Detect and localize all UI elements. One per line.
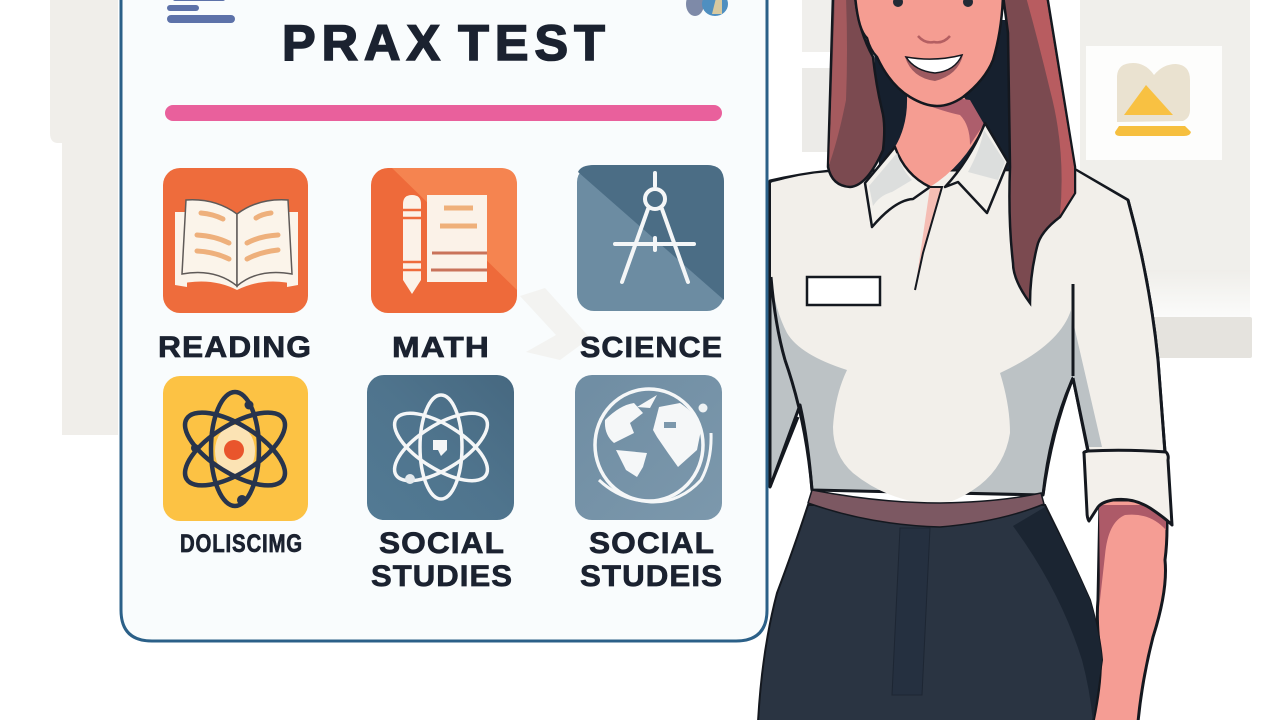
label: social, right column: SOCIAL — [589, 527, 715, 560]
tile: globe — [575, 375, 722, 520]
arm shadow — [1099, 505, 1166, 600]
hair right — [1003, 0, 1075, 303]
icon: open book — [175, 200, 298, 290]
label: math: MATH — [392, 332, 490, 364]
nose — [918, 36, 950, 42]
label: science: SCIENCE — [580, 332, 723, 364]
waistband — [808, 490, 1044, 527]
tile: science — [577, 165, 724, 311]
background: right wall panel — [802, 0, 1252, 358]
top-right globe mark — [686, 0, 728, 16]
face — [855, 0, 1003, 106]
neck shadow — [918, 98, 984, 145]
label: social studies, first line: SOCIAL — [379, 527, 505, 560]
sleeve cuff — [1084, 450, 1172, 525]
skirt — [758, 505, 1102, 720]
icon: globe — [595, 389, 711, 502]
main card panel — [121, 0, 767, 641]
tile: reading — [163, 168, 308, 313]
icon: atom dark — [174, 392, 296, 506]
blouse placket — [915, 187, 942, 290]
tile: social studies atom — [367, 375, 514, 520]
tile: math — [371, 168, 517, 313]
label: studeis, right column: STUDEIS — [580, 560, 723, 593]
wall picture: pyramid on book — [1086, 46, 1222, 160]
label: reading: READING — [158, 331, 312, 364]
blouse — [770, 170, 1165, 503]
arm — [1093, 500, 1167, 720]
icon: pencil and notebook — [403, 195, 487, 294]
label: garbled science: DOLISCIMG — [180, 530, 303, 558]
icon: atom light — [384, 395, 498, 499]
background: left wall panel — [50, 0, 118, 435]
woman presenter — [758, 0, 1172, 720]
icon: compass — [615, 173, 694, 282]
top-left menu mark — [167, 0, 235, 23]
title: PRAX TEST — [282, 15, 611, 71]
label: social studies, second line: STUDIES — [371, 560, 513, 593]
faint arrow watermark — [520, 288, 590, 360]
neck — [895, 96, 984, 187]
pink divider bar — [165, 105, 722, 121]
mouth — [905, 55, 963, 81]
hair back — [873, 20, 1009, 190]
hair left — [828, 0, 884, 187]
collar — [865, 123, 1008, 227]
eyes — [893, 0, 973, 7]
name badge — [807, 277, 880, 305]
tile: yellow atom — [163, 376, 308, 521]
